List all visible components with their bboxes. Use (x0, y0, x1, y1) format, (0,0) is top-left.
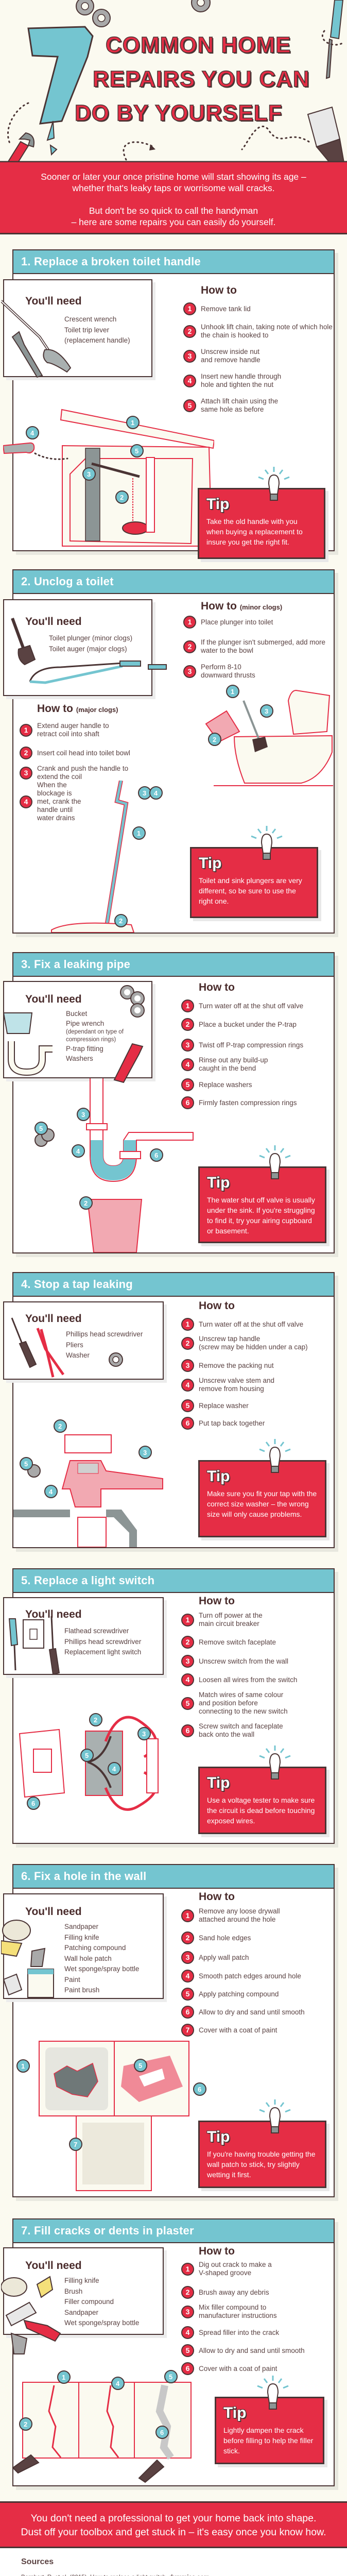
how to 5: 4 (186, 1675, 189, 1684)
how to minor: downward thrusts (201, 671, 255, 679)
how to major: blockage is (37, 789, 72, 797)
you'll need 3: compression rings) (66, 1037, 116, 1043)
how to 4 (181, 1300, 308, 1430)
how to 7: 2 (186, 2288, 189, 2296)
how to 1: Unscrew inside nut (201, 348, 259, 355)
how to 5 (181, 1595, 297, 1738)
how to 4: Put tap back together (199, 1419, 265, 1427)
panel 4: tap leaking: 4. Stop a tap leaking (21, 1278, 133, 1291)
how to 7: 5 (186, 2346, 189, 2354)
how to 6: attached around the hole (199, 1916, 275, 1923)
how to 6: Cover with a coat of paint (199, 2026, 277, 2034)
how to 3: Place a bucket under the P-trap (199, 1020, 297, 1028)
intro band: – here are some repairs you can easily do yourself. (72, 217, 275, 227)
toilet tank illustration: 2 (120, 494, 124, 501)
how to 5: connecting to the new switch (199, 1707, 288, 1715)
p-trap illustration: 4 (76, 1147, 80, 1155)
crack illustration: 2 (24, 2420, 27, 2428)
how to 7: Allow to dry and sand until smooth (199, 2346, 305, 2354)
tip 4: Tip (207, 1468, 230, 1485)
panel 7: cracks in plaster: 7. Fill cracks or dents in plaster (21, 2224, 194, 2237)
intro band: Sooner or later your once pristine home will start showing its age – (41, 172, 306, 182)
how to major: 4 (24, 798, 28, 806)
how to 3: 4 (186, 1060, 189, 1069)
panel 3: leaking pipe (12, 952, 335, 1253)
how to 4: 1 (186, 1320, 189, 1328)
how to 6: Apply wall patch (199, 1954, 249, 1961)
how to 4: 5 (186, 1401, 189, 1410)
tip 1: Take the old handle with you when buying a replacement to insure you get the right fit. (206, 517, 303, 546)
tip 2: Toilet and sink plungers are very different, so be sure to use the right one. (199, 876, 302, 905)
you'll need 3: Pipe wrench (66, 1020, 104, 1027)
you'll need 7 (3, 2247, 164, 2335)
how to 7 (181, 2245, 305, 2375)
you'll need 6: Wall hole patch (64, 1955, 112, 1962)
tip 1 (198, 488, 325, 559)
how to minor: 1 (188, 618, 192, 626)
you'll need 2: Toilet auger (major clogs) (49, 645, 127, 652)
intro band: But don't be so quick to call the handyman (89, 206, 258, 216)
how to major: Extend auger handle to (37, 722, 109, 730)
panel 4: tap leaking (12, 1272, 335, 1548)
how to major: Crank and push the handle to (37, 765, 128, 772)
toilet tank illustration: 3 (87, 470, 91, 478)
how to minor: How to (minor clogs) (201, 600, 282, 612)
you'll need 1: You'll need (25, 295, 82, 307)
wall hole illustration: 7 (74, 2141, 77, 2148)
icon: lightbulb (259, 1439, 290, 1473)
you'll need 6: You'll need (25, 1906, 82, 1918)
how to 4: Unscrew valve stem and (199, 1377, 274, 1384)
auger illustration (51, 781, 163, 933)
you'll need 4: Phillips head screwdriver (66, 1330, 143, 1338)
you'll need 1 (3, 279, 152, 377)
panel 5: light switch (12, 1568, 335, 1844)
panel 6: hole in wall (12, 1864, 335, 2197)
how to minor (183, 600, 325, 679)
tip 7: Lightly dampen the crack before filling to help the filler stick. (223, 2426, 313, 2455)
p-trap illustration: 5 (39, 1125, 43, 1132)
intro band (0, 162, 347, 234)
how to 1: 1 (188, 304, 192, 313)
footer sources (0, 2548, 347, 2576)
you'll need 3 (3, 981, 152, 1078)
you'll need 2 (3, 599, 152, 696)
you'll need 7: Wet sponge/spray bottle (64, 2319, 139, 2327)
how to 1: same hole as before (201, 405, 264, 413)
panel 1: toilet handle (12, 249, 335, 551)
sources heading: Sources (21, 2557, 54, 2566)
plunger toilet illustration (205, 685, 333, 786)
how to 4: Turn water off at the shut off valve (199, 1320, 303, 1328)
wall hole illustration: 1 (21, 2062, 25, 2070)
you'll need 5: Replacement light switch (64, 1648, 141, 1656)
how to minor: 3 (188, 667, 192, 675)
how to 1: Attach lift chain using the (201, 397, 278, 405)
tip 3: Tip (207, 1174, 230, 1191)
you'll need 7: You'll need (25, 2260, 82, 2272)
closing band (0, 2501, 347, 2548)
how to major: 1 (24, 725, 28, 734)
you'll need 5: Flathead screwdriver (64, 1627, 129, 1635)
you'll need 7: Sandpaper (64, 2308, 98, 2316)
plunger toilet illustration: 3 (265, 707, 268, 715)
tap illustration: 4 (49, 1488, 53, 1496)
title: COMMON HOME (106, 32, 291, 58)
title (75, 32, 310, 126)
crack illustration: 1 (62, 2374, 65, 2381)
tip 3 (198, 1166, 326, 1243)
tip 6 (198, 2121, 326, 2188)
p-trap illustration: 6 (154, 1151, 158, 1159)
how to 5: Remove switch faceplate (199, 1638, 276, 1646)
how to 7: manufacturer instructions (199, 2312, 277, 2319)
p-trap illustration: 3 (81, 1111, 85, 1118)
how to major: water drains (37, 814, 75, 822)
how to 4: 3 (186, 1361, 189, 1369)
how to 5: Turn off power at the (199, 1612, 263, 1619)
you'll need 6 (3, 1893, 164, 1999)
how to 7: Dig out crack to make a (199, 2261, 272, 2268)
how to 6 (181, 1891, 305, 2037)
how to 4: How to (199, 1300, 235, 1312)
how to major: How to (major clogs) (37, 703, 118, 715)
how to 7: V-shaped groove (199, 2269, 251, 2277)
how to 3: Firmly fasten compression rings (199, 1098, 297, 1107)
icon: lightbulb (259, 1745, 290, 1780)
how to 4: 2 (186, 1338, 189, 1347)
wall hole illustration: 6 (198, 2086, 201, 2093)
how to 5: Unscrew switch from the wall (199, 1657, 288, 1665)
tip 4 (198, 1460, 326, 1537)
toilet tank illustration: 1 (131, 419, 134, 427)
how to 5: main circuit breaker (199, 1620, 259, 1628)
how to 3: 1 (186, 1002, 189, 1010)
how to 6: How to (199, 1891, 235, 1903)
icon: lightbulb (251, 826, 282, 860)
how to 1: How to (201, 284, 237, 296)
how to 7: How to (199, 2245, 235, 2257)
how to 4: (screw may be hidden under a cap) (199, 1343, 308, 1351)
you'll need 6: Sandpaper (64, 1923, 98, 1930)
tip 4: Make sure you fit your tap with the correct size washer – the wrong size will only cause problems. (207, 1489, 317, 1518)
how to major: extend the coil (37, 773, 82, 781)
you'll need 3: P-trap fitting (66, 1045, 103, 1053)
you'll need 6: Paint (64, 1975, 80, 1984)
plunger toilet illustration: 1 (231, 688, 234, 696)
tip 6: Tip (207, 2128, 230, 2145)
you'll need 2: You'll need (25, 616, 82, 628)
how to 5: back onto the wall (199, 1731, 254, 1738)
how to 6: 4 (186, 1972, 189, 1980)
how to 5: 6 (186, 1726, 189, 1734)
how to 3: 3 (186, 1041, 189, 1049)
how to 3: How to (199, 981, 235, 993)
closing band: You don't need a professional to get your home back into shape. (31, 2513, 316, 2524)
how to 7: Mix filler compound to (199, 2303, 266, 2311)
you'll need 6: Wet sponge/spray bottle (64, 1965, 139, 1973)
wall hole illustration (16, 2041, 206, 2191)
how to 4: 6 (186, 1419, 189, 1427)
closing band: Dust off your toolbox and get stuck in – it's easy once you know how. (21, 2527, 326, 2538)
you'll need 1: (replacement handle) (64, 336, 130, 344)
tip 6: If you're having trouble getting the wall patch to stick, try slightly wetting it first. (207, 2150, 315, 2179)
how to 3: 5 (186, 1080, 189, 1089)
how to 3 (181, 981, 303, 1109)
tip 3: The water shut off valve is usually under the sink. If you're struggling to find it, try your airing cupboard or basement. (207, 1196, 315, 1235)
you'll need 3: You'll need (25, 993, 82, 1005)
how to 6: 2 (186, 1934, 189, 1942)
icon: lightbulb (259, 1145, 290, 1179)
how to 1: Unhook lift chain, taking note of which hole the chain is hooked to (201, 323, 333, 339)
how to minor: If the plunger isn't submerged, add more water to the bowl (201, 638, 325, 654)
crack illustration (12, 2370, 192, 2483)
light switch illustration: 6 (31, 1800, 35, 1807)
how to major: 2 (24, 749, 28, 757)
tap illustration (13, 1419, 163, 1547)
how to 4: Remove the packing nut (199, 1361, 274, 1369)
tap illustration: 2 (58, 1422, 62, 1430)
how to major (20, 703, 130, 822)
how to 5: and position before (199, 1699, 258, 1707)
how to 1: 3 (188, 351, 192, 360)
panel 6: hole in wall: 6. Fix a hole in the wall (21, 1870, 146, 1883)
how to 3: caught in the bend (199, 1064, 256, 1072)
how to 1 (183, 284, 333, 413)
how to 5: 5 (186, 1699, 189, 1707)
wall hole illustration: 5 (138, 2062, 142, 2070)
how to 1: Insert new handle through (201, 372, 281, 380)
icon: lightbulb (259, 2099, 290, 2133)
how to 5: 1 (186, 1616, 189, 1624)
how to 5: Screw switch and faceplate (199, 1722, 283, 1730)
auger illustration: 3 (143, 789, 146, 797)
toilet tank illustration (3, 409, 214, 547)
how to 1: Remove tank lid (201, 305, 251, 312)
you'll need 4: You'll need (25, 1313, 82, 1325)
you'll need 6: Patching compound (64, 1944, 126, 1952)
how to 4: Unscrew tap handle (199, 1335, 260, 1343)
how to minor: Perform 8-10 (201, 663, 241, 671)
panel 7: cracks in plaster (12, 2218, 335, 2486)
how to 6: 7 (186, 2026, 189, 2034)
how to major: met, crank the (37, 798, 81, 805)
how to major: 3 (24, 769, 28, 777)
how to 3: Rinse out any build-up (199, 1056, 268, 1064)
p-trap illustration: 2 (84, 1199, 88, 1207)
how to 6: 3 (186, 1953, 189, 1961)
how to 7: 1 (186, 2265, 189, 2273)
how to 4: Replace washer (199, 1401, 249, 1410)
how to 6: Sand hole edges (199, 1934, 251, 1941)
you'll need 7: Brush (64, 2287, 82, 2295)
how to 3: 6 (186, 1098, 189, 1107)
how to 4: 4 (186, 1381, 189, 1389)
you'll need 5: Phillips head screwdriver (64, 1637, 141, 1646)
how to major: handle until (37, 806, 73, 814)
tip 2: Tip (199, 855, 221, 872)
how to 6: Apply patching compound (199, 1990, 279, 1998)
how to 6: 5 (186, 1990, 189, 1998)
auger illustration: 4 (154, 789, 158, 797)
you'll need 2: Toilet plunger (minor clogs) (49, 634, 132, 642)
light switch illustration (19, 1713, 159, 1811)
auger illustration: 2 (119, 917, 123, 925)
light switch illustration: 5 (85, 1752, 89, 1759)
how to 6: Smooth patch edges around hole (199, 1972, 301, 1979)
toilet tank illustration: 4 (30, 429, 34, 437)
how to 1: and remove handle (201, 356, 261, 364)
panel 2: unclog toilet: 2. Unclog a toilet (21, 575, 114, 588)
crack illustration: 5 (169, 2373, 172, 2381)
how to 6: 6 (186, 2008, 189, 2016)
you'll need 7: Filling knife (64, 2277, 99, 2284)
icon: lightbulb (258, 467, 289, 501)
you'll need 3: (dependant on type of (66, 1029, 124, 1035)
how to 3: Turn water off at the shut off valve (199, 1002, 303, 1010)
panel 2: unclog toilet (12, 569, 335, 934)
crack illustration: 4 (116, 2380, 120, 2387)
light switch illustration: 2 (94, 1716, 97, 1724)
how to 1: 5 (188, 401, 192, 409)
toilet tank illustration: 5 (135, 447, 138, 455)
you'll need 6: Filling knife (64, 1933, 99, 1941)
plunger toilet illustration: 2 (213, 736, 216, 743)
how to 5: How to (199, 1595, 235, 1607)
how to 3: Replace washers (199, 1081, 252, 1088)
you'll need 7: Filler compound (64, 2298, 114, 2306)
how to major: When the (37, 781, 67, 789)
title: DO BY YOURSELF (75, 100, 283, 126)
you'll need 3: Washers (66, 1055, 93, 1062)
how to 3: Twist off P-trap compression rings (199, 1041, 303, 1049)
how to 5: Loosen all wires from the switch (199, 1675, 297, 1684)
tip 1: Tip (206, 496, 229, 513)
how to 1: 2 (188, 327, 192, 335)
you'll need 3: Bucket (66, 1010, 87, 1018)
how to 6: Remove any loose drywall (199, 1907, 280, 1915)
how to 7: Brush away any debris (199, 2289, 269, 2296)
how to major: Insert coil head into toilet bowl (37, 749, 130, 756)
how to 7: Spread filler into the crack (199, 2329, 279, 2336)
light switch illustration: 3 (142, 1730, 146, 1738)
tip 5: Tip (207, 1774, 230, 1791)
how to 7: 3 (186, 2307, 189, 2315)
how to minor: 2 (188, 642, 192, 650)
panel 1: toilet handle: 1. Replace a broken toilet handle (21, 255, 201, 268)
how to 5: 3 (186, 1657, 189, 1665)
how to major: retract coil into shaft (37, 730, 99, 738)
header illustration (0, 0, 347, 162)
how to 3: 2 (186, 1020, 189, 1028)
title: REPAIRS YOU CAN (93, 66, 310, 92)
tip 5 (198, 1767, 326, 1834)
panel 5: light switch: 5. Replace a light switch (21, 1574, 154, 1587)
tip 7 (215, 2397, 324, 2464)
how to 4: remove from housing (199, 1385, 264, 1393)
how to 7: Cover with a coat of paint (199, 2365, 277, 2372)
you'll need 5 (3, 1597, 164, 1675)
how to 1: 4 (188, 376, 192, 384)
icon: lightbulb (257, 2376, 288, 2410)
you'll need 1: Crescent wrench (64, 315, 116, 323)
tap illustration: 5 (24, 1460, 28, 1468)
tip 2 (190, 847, 318, 918)
how to minor: Place plunger into toilet (201, 618, 273, 625)
tip 7: Tip (223, 2404, 246, 2421)
how to 5: 2 (186, 1638, 189, 1646)
how to 6: 1 (186, 1911, 189, 1920)
tap illustration: 3 (143, 1449, 147, 1456)
auger illustration: 1 (137, 829, 141, 837)
p-trap illustration (34, 1078, 194, 1252)
intro band: whether that's leaky taps or worrisome wall cracks. (72, 183, 275, 193)
how to 7: 6 (186, 2364, 189, 2372)
how to 7: 4 (186, 2328, 189, 2336)
you'll need 1: Toilet trip lever (64, 326, 109, 334)
you'll need 4: Washer (66, 1351, 90, 1359)
you'll need 5: You'll need (25, 1608, 82, 1620)
crack illustration: 6 (160, 2429, 164, 2436)
how to 5: Match wires of same colour (199, 1691, 283, 1699)
panel 3: leaking pipe: 3. Fix a leaking pipe (21, 958, 130, 971)
tip 5: Use a voltage tester to make sure the circuit is dead before touching exposed wires. (207, 1796, 315, 1825)
you'll need 4 (3, 1301, 164, 1380)
how to 6: Allow to dry and sand until smooth (199, 2008, 305, 2015)
light switch illustration: 4 (112, 1765, 116, 1773)
how to 1: hole and tighten the nut (201, 381, 273, 388)
you'll need 6: Paint brush (64, 1986, 99, 1994)
you'll need 4: Pliers (66, 1341, 83, 1349)
